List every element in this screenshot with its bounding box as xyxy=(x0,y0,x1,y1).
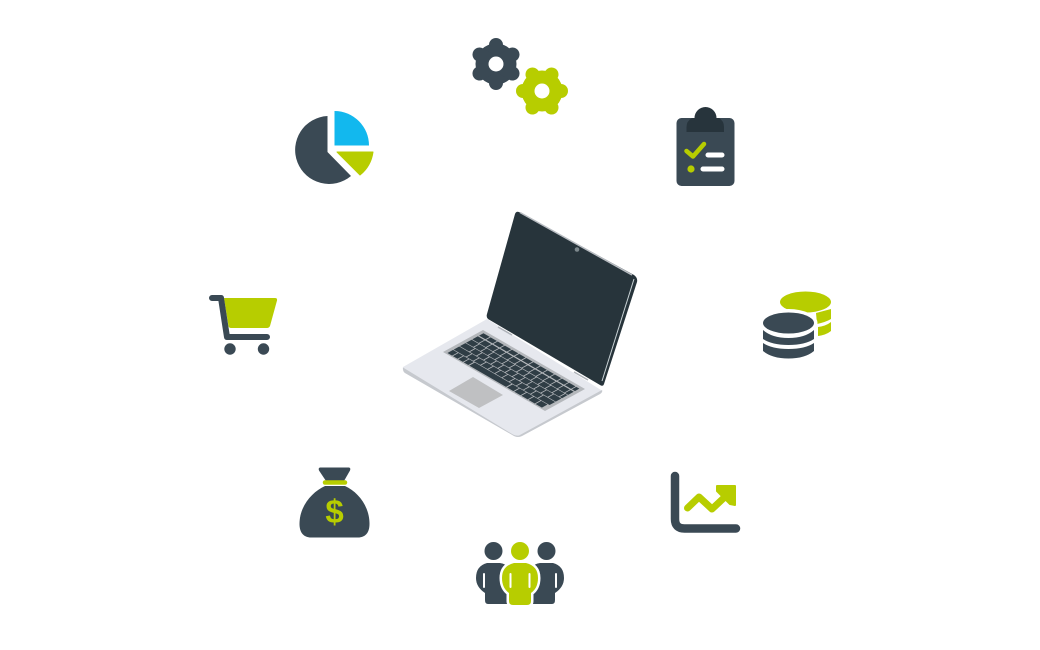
screen lid xyxy=(487,212,637,386)
laptop base xyxy=(403,319,602,437)
icon: shopping cart xyxy=(212,298,277,355)
hinges xyxy=(498,327,588,380)
icon: growth chart xyxy=(675,476,736,528)
icon: gears xyxy=(476,44,562,112)
icon: money bag: $ xyxy=(325,493,344,530)
trackpad xyxy=(449,377,503,408)
icon: laptop xyxy=(403,212,637,437)
icon: clipboard checklist xyxy=(676,107,734,186)
keyboard xyxy=(443,330,585,411)
icon: money bag xyxy=(300,468,370,538)
webcam xyxy=(575,247,579,252)
icon: team of people xyxy=(476,542,564,605)
icon: coin stacks xyxy=(760,292,831,358)
icon: pie chart xyxy=(295,111,373,184)
